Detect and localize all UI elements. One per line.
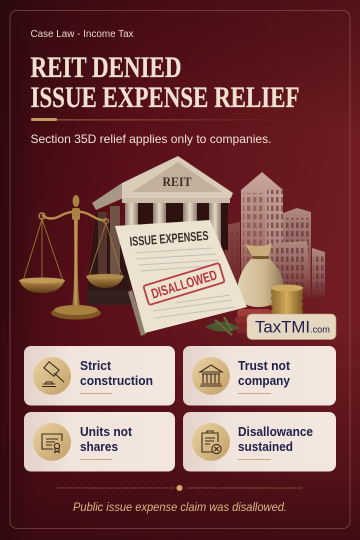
panel: strict construction <box>24 346 175 406</box>
logo badge: TaxTMI.com: TaxTMI <box>255 318 310 336</box>
card label: construction <box>80 373 153 388</box>
icon: institution building <box>192 357 230 395</box>
icon: coin stack <box>271 284 303 316</box>
card label <box>80 424 133 454</box>
icon: office towers <box>225 172 325 300</box>
panel: disallowance sustained <box>183 412 336 472</box>
icon: REIT temple: REIT <box>162 175 192 189</box>
card label <box>238 424 313 454</box>
subtitle: Section 35D relief applies only to companies. <box>30 132 272 146</box>
card label: Trust not <box>238 358 291 373</box>
card label: Strict <box>80 358 112 373</box>
document: issue expenses <box>115 220 247 336</box>
card label: Units not <box>80 424 133 439</box>
card label <box>238 358 291 388</box>
card label: Disallowance <box>238 424 313 439</box>
title <box>30 52 300 114</box>
conclusion note: Public issue expense claim was disallowed. <box>73 500 287 514</box>
card label: shares <box>80 439 118 454</box>
document: issue expenses: ISSUE EXPENSES <box>129 228 209 249</box>
stamp: disallowed: DISALLOWED <box>149 266 219 302</box>
icon: red discs and leaves <box>205 309 271 335</box>
icon: REIT temple <box>87 156 233 305</box>
eyebrow label: Case Law - Income Tax <box>30 29 134 40</box>
card label <box>80 358 153 388</box>
panel: trust not company <box>183 346 336 406</box>
icon: gavel <box>33 357 71 395</box>
logo badge: TaxTMI.com <box>247 314 336 340</box>
icon: clipboard with cross <box>192 423 230 461</box>
illustration <box>19 156 336 340</box>
panel: units not shares <box>24 412 175 472</box>
icon: money bag <box>237 243 283 307</box>
card label: sustained <box>238 439 293 454</box>
icon: balance scales <box>19 195 124 320</box>
icon: certificate <box>33 423 71 461</box>
title: REIT DENIED <box>30 52 182 84</box>
logo badge: TaxTMI.com: .com <box>310 324 330 336</box>
footer divider <box>57 485 303 491</box>
title rule <box>31 118 285 121</box>
card label: company <box>238 373 291 388</box>
